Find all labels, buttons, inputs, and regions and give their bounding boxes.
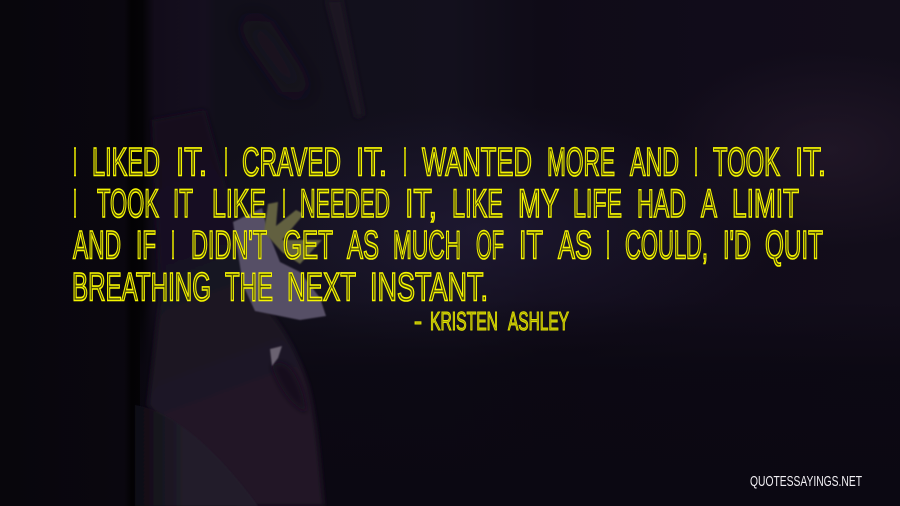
quote line 4: THE (225, 266, 273, 310)
petal fold shadow (272, 363, 306, 412)
quote line 3: AND (73, 224, 121, 268)
quote line 2: IT (173, 182, 193, 226)
quote line 3: QUIT (765, 224, 823, 268)
author attribution: ASHLEY (508, 306, 569, 336)
quote line 4: NEXT (287, 266, 356, 310)
quote line 3 (73, 224, 823, 268)
quote line 2: LIKE (212, 182, 266, 226)
quote line 3: GET (283, 224, 333, 268)
lower-left skin curve (135, 405, 258, 506)
quote line 2: I (73, 182, 77, 226)
quote line 1: TOOK (713, 140, 780, 184)
quote line 4: INSTANT. (370, 266, 488, 310)
quote line 3: IT (519, 224, 543, 268)
quote line 1 (73, 140, 826, 184)
quote line 3: I'D (723, 224, 751, 268)
quote line 2 (73, 182, 799, 226)
quote line 2: I (282, 182, 286, 226)
quote line 1: MORE (547, 140, 615, 184)
quote line 1: IT. (795, 140, 826, 184)
quote line 1: LIKED (92, 140, 160, 184)
quote line 1: IT. (176, 140, 207, 184)
quote line 1: I (694, 140, 698, 184)
quote line 3: MUCH (393, 224, 461, 268)
pale flower petal (233, 208, 326, 320)
quote line 1: I (73, 140, 77, 184)
quote line 4: BREATHING (72, 266, 211, 310)
quote line 1: WANTED (422, 140, 532, 184)
top streaks (240, 20, 308, 92)
quote line 2: LIMIT (732, 182, 799, 226)
quote line 1: IT. (356, 140, 387, 184)
small petal highlight (270, 346, 282, 366)
author attribution: - (414, 306, 422, 336)
dark purple petal (148, 110, 324, 506)
quote line 3: I (171, 224, 175, 268)
quote line 2: NEEDED (300, 182, 390, 226)
quote line 3: IF (136, 224, 156, 268)
quote line 2: TOOK (97, 182, 159, 226)
quote line 3: COULD, (625, 224, 708, 268)
quote line 3: DIDN'T (191, 224, 267, 268)
author attribution: KRISTEN (430, 306, 498, 336)
quote text (72, 140, 826, 310)
quote line 4 (72, 266, 488, 310)
quote line 2: IT, (405, 182, 437, 226)
quote line 1: I (224, 140, 228, 184)
quote line 1: AND (630, 140, 679, 184)
quote line 2: A (701, 182, 717, 226)
quote line 2: LIKE (452, 182, 503, 226)
quote line 3: AS (558, 224, 592, 268)
quote line 1: I (403, 140, 407, 184)
quote line 2: HAD (637, 182, 686, 226)
quote line 1: CRAVED (242, 140, 341, 184)
quote line 3: AS (347, 224, 379, 268)
quote line 3: OF (476, 224, 504, 268)
quote line 3: I (606, 224, 610, 268)
quote line 2: MY (518, 182, 559, 226)
quote line 2: LIFE (573, 182, 622, 226)
flower stamens (264, 202, 322, 264)
